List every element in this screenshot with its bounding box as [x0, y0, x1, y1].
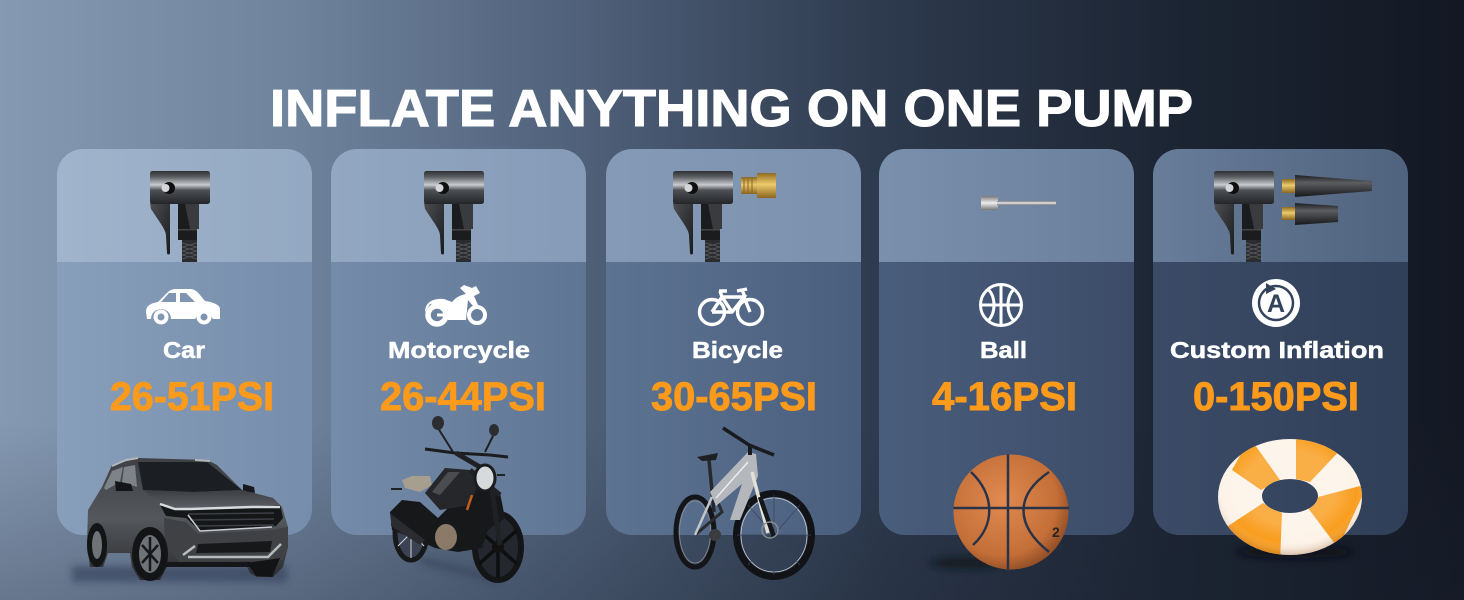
panel upper: ball — [879, 149, 1134, 262]
icon: auto mode: A — [1267, 290, 1285, 318]
photo: basketball — [930, 454, 1069, 570]
icon: pump head, custom — [1214, 171, 1274, 262]
photo: motorcycle — [390, 416, 521, 580]
icon: pump head, car — [150, 171, 210, 262]
label: motorcycle: Motorcycle — [388, 337, 530, 363]
icon: pump head, bicycle — [673, 171, 733, 262]
panel upper: bicycle — [606, 149, 861, 262]
title: INFLATE ANYTHING ON ONE PUMP — [270, 80, 1193, 138]
panel upper: motorcycle — [331, 149, 586, 262]
psi: ball: 4-16PSI — [932, 375, 1077, 419]
icon: ball needle — [981, 196, 1056, 210]
icon: car — [146, 289, 220, 322]
psi: car: 26-51PSI — [110, 375, 274, 419]
label: bicycle: Bicycle — [692, 337, 783, 363]
icon: pump head, motorcycle — [424, 171, 484, 262]
panel: car — [57, 149, 312, 535]
panel lower: motorcycle — [331, 262, 586, 535]
label: ball: Ball — [980, 337, 1027, 363]
icon: long cone adapter — [1282, 175, 1372, 197]
photo: car — [72, 458, 288, 582]
icon: basketball — [980, 284, 1022, 326]
icon: bicycle — [700, 289, 762, 324]
photo: basketball: 2 — [1052, 524, 1060, 540]
photo: swim ring — [1218, 439, 1362, 561]
label: car: Car — [163, 337, 205, 363]
panel: custom inflation — [1153, 149, 1408, 535]
icon: auto mode — [1252, 279, 1300, 327]
psi: custom inflation: 0-150PSI — [1193, 375, 1359, 419]
icon: short cone adapter — [1282, 203, 1338, 225]
panel: motorcycle — [331, 149, 586, 535]
panel: ball — [879, 149, 1134, 535]
label: custom inflation: Custom Inflation — [1170, 337, 1384, 363]
icon: brass adapter — [741, 173, 776, 198]
panel: bicycle — [606, 149, 861, 535]
panel lower: car — [57, 262, 312, 535]
panel lower: custom inflation — [1153, 262, 1408, 535]
panel upper: custom inflation — [1153, 149, 1408, 262]
psi: motorcycle: 26-44PSI — [380, 375, 546, 419]
panel upper: car — [57, 149, 312, 262]
photo: bicycle — [676, 428, 812, 576]
icon: motorcycle — [425, 285, 485, 324]
panel lower: ball — [879, 262, 1134, 535]
psi: bicycle: 30-65PSI — [651, 375, 817, 419]
panel lower: bicycle — [606, 262, 861, 535]
